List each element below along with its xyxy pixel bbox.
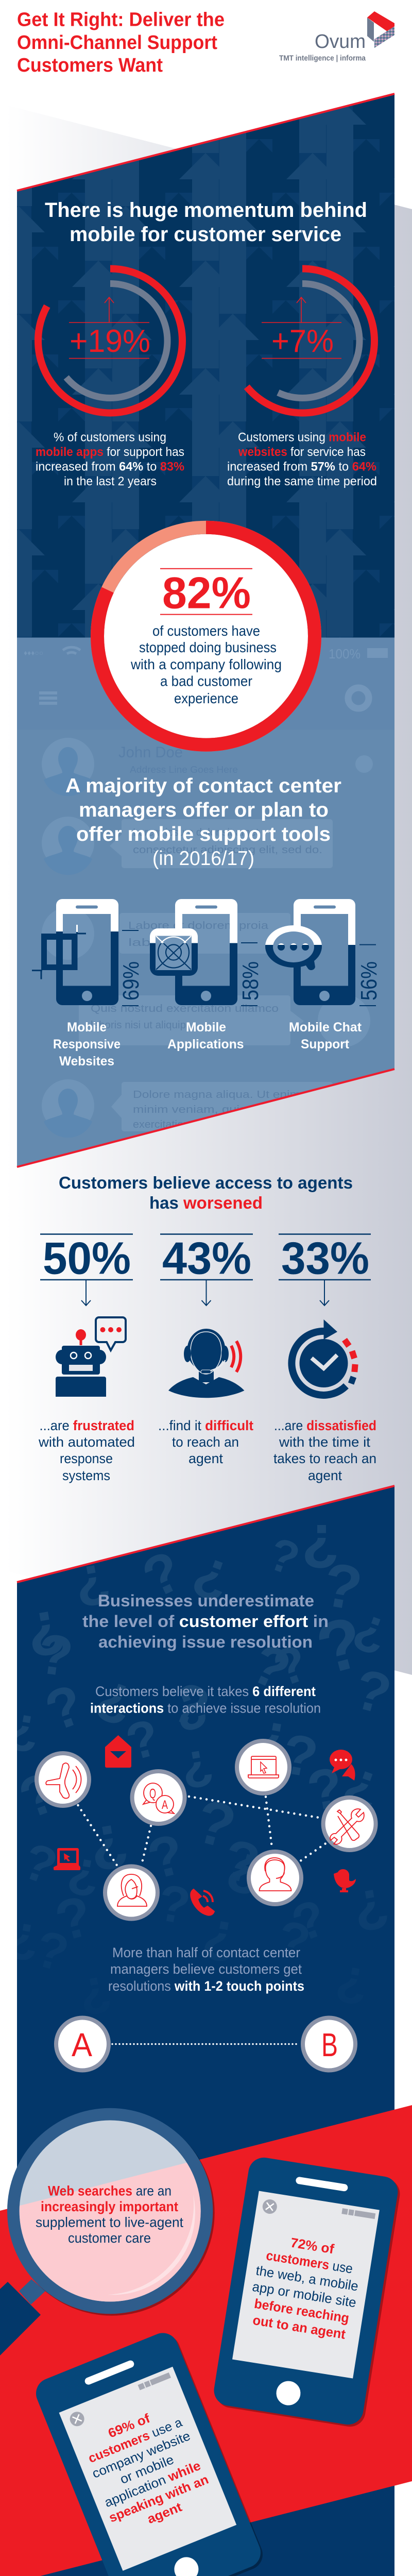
icon: female agent circle <box>105 1866 158 1919</box>
question mark pattern: ? <box>188 1786 243 1862</box>
question mark pattern: ? <box>3 1702 44 1764</box>
text: dissatisfied: ...are dissatisfied <box>274 1418 376 1433</box>
text: one to two touch points: resolutions with 1-2 touch points <box>108 1978 304 1994</box>
text: mobile apps stat <box>36 431 184 488</box>
ghost phone chat screen: Quis nostrud exercitation ullamco <box>91 1003 279 1014</box>
question mark pattern: ? <box>38 1672 92 1743</box>
text: mobile apps stat: % of customers using <box>54 431 166 445</box>
chart: phone 56% mobile chat support: 56% <box>356 961 382 1001</box>
phone: 69% of customers: 69% of <box>106 2411 152 2441</box>
question mark pattern: ? <box>141 1822 191 1892</box>
question mark pattern: ? <box>49 1884 99 1954</box>
chart: phone 69% mobile responsive websites: 69% <box>118 961 144 1001</box>
ghost phone chat screen: exercitation <box>133 1119 190 1130</box>
icon: headset agent <box>168 1329 244 1398</box>
text: one to two touch points: managers believe customers get <box>110 1961 302 1977</box>
question mark pattern: ? <box>84 1810 133 1885</box>
stat: 43% <box>160 1232 253 1306</box>
question mark pattern: ? <box>198 1907 243 1975</box>
heading: mobile momentum: mobile for customer service <box>70 223 341 246</box>
text: difficult: agent <box>188 1451 223 1466</box>
ghost phone chat screen: consectetur adipiscing elit, sed do. <box>133 844 322 856</box>
chart: phone 58% mobile applications <box>150 899 263 1052</box>
question mark pattern: ? <box>216 1827 266 1897</box>
question mark pattern: ? <box>120 1708 165 1772</box>
phone: 72% of customers: before reaching <box>253 2296 350 2326</box>
magnifier text <box>36 2183 183 2246</box>
question mark pattern: ? <box>334 1755 388 1826</box>
icon: Q and A circle <box>132 1771 185 1824</box>
panel: mobile momentum <box>17 94 394 638</box>
panel: contact center mobile tools <box>17 638 394 1173</box>
icon: tools circle <box>323 1798 376 1850</box>
ghost phone chat screen: minim veniam, quis <box>133 1104 246 1115</box>
question mark pattern: ? <box>165 1679 214 1744</box>
chart: phone 69% mobile responsive websites: Responsive <box>53 1037 121 1052</box>
ghost phone chat screen: labore. <box>128 937 180 948</box>
panel: red web search band <box>0 2105 412 2576</box>
stat: 43%: 43% <box>162 1232 251 1283</box>
icon: male agent circle <box>249 1852 301 1904</box>
chart: phone 58% mobile applications: 58% <box>238 961 263 1001</box>
panel: access to agents <box>38 1173 376 1483</box>
question mark pattern: ? <box>133 1538 192 1611</box>
question mark pattern: ? <box>33 1621 77 1689</box>
question mark pattern: ? <box>220 1838 270 1908</box>
text: mobile websites stat <box>227 431 377 488</box>
diagram: A to B: A <box>72 2026 92 2063</box>
magnifier text: supplement to live-agent <box>36 2214 183 2230</box>
phone: 72% of customers: customers use <box>265 2247 354 2277</box>
question mark pattern: ? <box>346 1602 394 1667</box>
text: difficult: to reach an <box>172 1434 239 1450</box>
callout: 82% ring: with a company following <box>130 656 282 672</box>
heading: contact center tools: managers offer or plan to <box>79 799 329 821</box>
callout: 82% ring: experience <box>174 690 238 706</box>
chart: phone 56% mobile chat support: Mobile Chat <box>289 1020 362 1035</box>
dotted connectors <box>78 1797 325 1866</box>
red diagonal top edge <box>17 1486 394 1582</box>
text: frustrated: with automated <box>38 1434 135 1450</box>
question mark pattern: ? <box>75 1964 116 2027</box>
phone: 72% of customers: out to an agent <box>252 2312 347 2342</box>
question mark pattern: ? <box>3 1910 44 1973</box>
text: difficult: ...find it difficult <box>158 1418 253 1433</box>
diagram: A to B <box>56 2018 355 2070</box>
chart: mobile websites ring +7%: +7% <box>271 324 334 359</box>
chart: mobile websites ring +7% <box>230 269 374 413</box>
phone: 69% of customers: customers use a <box>86 2415 184 2466</box>
text: frustrated: ...are frustrated <box>39 1418 134 1433</box>
callout: 82% ring: 82% <box>162 569 251 618</box>
panel: customer effort <box>3 1486 398 2576</box>
question mark pattern: ? <box>177 1738 218 1800</box>
panel background <box>17 1486 394 2576</box>
icon: envelope <box>105 1735 131 1768</box>
ghost phone chat screen: Labore et dolorem proia <box>128 920 269 931</box>
chart: phone 56% mobile chat support: Support <box>301 1037 350 1052</box>
stat: 50% <box>40 1232 133 1306</box>
chart: mobile apps ring +19%: +19% <box>70 324 150 359</box>
magnifier text: customer care <box>68 2230 151 2246</box>
heading: customer effort: Businesses underestimate <box>98 1591 314 1610</box>
text: difficult <box>158 1418 253 1466</box>
text: mobile apps stat: increased from 64% to 83% <box>36 460 184 474</box>
text: one to two touch points: More than half of contact center <box>112 1945 300 1960</box>
magnifier text: increasingly important <box>41 2199 178 2214</box>
heading: access to agents <box>59 1173 353 1212</box>
question mark pattern: ? <box>11 1759 65 1831</box>
question mark pattern: ? <box>271 1909 316 1973</box>
text: dissatisfied <box>273 1418 376 1483</box>
chart: phone 69% mobile responsive websites <box>32 899 144 1069</box>
question mark pattern: ? <box>29 1919 75 1983</box>
question mark pattern: ? <box>21 1596 71 1671</box>
icon: ringing phone <box>191 1889 214 1916</box>
text: six interactions: interactions to achieve issue resolution <box>90 1700 321 1716</box>
title: Get It Right: Deliver the <box>17 9 225 30</box>
question mark pattern: ? <box>331 1954 372 2016</box>
text: mobile websites stat: Customers using mobile <box>238 431 366 445</box>
text: one to two touch points <box>108 1945 304 1994</box>
text: mobile apps stat: in the last 2 years <box>64 474 157 488</box>
phone: 69% of customers: speaking with an <box>107 2472 211 2526</box>
heading: mobile momentum: There is huge momentum behind <box>45 199 367 222</box>
text: frustrated: response <box>60 1451 113 1466</box>
question mark pattern: ? <box>15 1832 64 1896</box>
question mark pattern: ? <box>303 1755 348 1823</box>
question mark pattern: ? <box>266 1633 315 1698</box>
heading: customer effort: the level of customer effort in <box>82 1612 329 1631</box>
text: six interactions <box>90 1684 321 1716</box>
chart: phone 56% mobile chat support <box>265 899 382 1052</box>
logo: Ovum header <box>279 11 394 63</box>
title <box>17 9 225 76</box>
chart: mobile apps ring +19% <box>38 269 182 413</box>
title: Omni-Channel Support <box>17 32 217 54</box>
ghost phone chat screen: 100% <box>329 646 360 662</box>
ghost phone chat screen: Lorem ipsum dolor sit amet, <box>133 827 262 838</box>
icon: app <box>150 928 198 976</box>
stat: 33%: 33% <box>281 1232 369 1283</box>
phone: 72% of customers <box>212 2156 402 2429</box>
title: Customers Want <box>17 55 163 76</box>
question mark pattern: ? <box>308 1600 372 1690</box>
text: mobile websites stat: websites for service has <box>238 445 366 459</box>
phone: 72% of customers: 72% of <box>289 2234 335 2257</box>
question mark pattern: ? <box>63 1846 104 1908</box>
callout: 82% ring: stopped doing business <box>139 639 277 655</box>
heading: customer effort <box>82 1591 329 1651</box>
ghost phone chat screen: Dolore magna aliqua. Ut enim <box>133 1089 300 1100</box>
icon: laptop circle <box>237 1741 289 1793</box>
chart: phone 69% mobile responsive websites: Websites <box>59 1054 114 1069</box>
heading: contact center tools: offer mobile support tools <box>76 823 331 845</box>
panel background <box>17 638 394 1167</box>
question mark pattern: ? <box>349 1876 393 1944</box>
red diagonal bottom edge <box>17 1069 394 1167</box>
callout: 82% ring <box>97 528 315 745</box>
stat: 33% <box>279 1232 371 1306</box>
question mark pattern: ? <box>285 1888 334 1953</box>
heading: access to agents: Customers believe access to agents <box>59 1173 353 1192</box>
question mark pattern: ? <box>242 1631 300 1703</box>
icon: Q and A circle: Q <box>149 1786 156 1801</box>
chart: phone 58% mobile applications: Applications <box>167 1037 244 1052</box>
icon: bird <box>334 1869 356 1892</box>
phone: 69% of customers: application while <box>102 2459 203 2510</box>
chart: phone 69% mobile responsive websites: Mobile <box>67 1020 107 1035</box>
text: frustrated <box>38 1418 135 1483</box>
text: mobile apps stat: mobile apps for support has <box>36 445 184 459</box>
question mark pattern: ? <box>153 1873 195 1936</box>
network of touch points <box>37 1735 376 1919</box>
red diagonal top edge <box>17 94 394 191</box>
text: frustrated: systems <box>62 1468 110 1483</box>
question mark pattern: ? <box>184 1544 238 1615</box>
logo: Ovum header: TMT intelligence | informa <box>279 54 366 63</box>
icon: chat bubble <box>265 925 322 970</box>
magnifier text: Web searches are an <box>48 2183 171 2199</box>
callout: 82% ring: of customers have <box>152 623 260 639</box>
question mark pattern <box>3 1512 398 2027</box>
ghost phone chat screen <box>24 646 388 1131</box>
text: mobile websites stat: during the same time period <box>227 474 377 488</box>
logo: Ovum header: Ovum <box>315 31 366 53</box>
phone: 69% of customers: company website <box>90 2429 193 2481</box>
heading: access to agents: has worsened <box>149 1193 263 1212</box>
text: dissatisfied: with the time it <box>279 1434 371 1450</box>
icon: small laptop <box>54 1848 80 1870</box>
icon: Q and A circle: A <box>162 1798 168 1812</box>
ghost phone chat screen: ♦♦♦○○ <box>24 649 43 657</box>
background band: upper grey <box>0 104 412 1675</box>
chart: phone 58% mobile applications: Mobile <box>186 1020 226 1035</box>
question mark pattern: ? <box>163 1669 217 1741</box>
panel background with arrows <box>17 94 394 638</box>
ghost phone chat screen: John Doe <box>118 744 183 761</box>
diagram: A to B: B <box>321 2026 338 2063</box>
callout: 82% ring: a bad customer <box>160 673 252 689</box>
icon: robot <box>56 1317 126 1397</box>
icon: responsive crop <box>41 934 77 970</box>
heading: customer effort: achieving issue resolution <box>98 1633 313 1651</box>
icon: chat bubbles <box>330 1750 355 1781</box>
question mark pattern: ? <box>262 1528 306 1586</box>
ghost phone chat screen: laboris nisi ut aliquip <box>91 1020 186 1031</box>
question mark pattern: ? <box>88 1667 142 1739</box>
question mark pattern: ? <box>70 1551 115 1619</box>
question mark pattern: ? <box>278 1722 322 1790</box>
text: six interactions: Customers believe it takes 6 different <box>95 1684 316 1699</box>
magnifier handle <box>19 2279 45 2304</box>
phone: 72% of customers: app or mobile site <box>251 2279 357 2310</box>
question mark pattern: ? <box>301 1512 339 1581</box>
text: mobile websites stat: increased from 57% to 64% <box>227 460 376 474</box>
heading: mobile momentum <box>45 199 367 246</box>
text: dissatisfied: takes to reach an <box>273 1451 376 1466</box>
heading: contact center tools: A majority of contact center <box>65 775 341 797</box>
magnifying glass callout <box>0 2108 216 2355</box>
question mark pattern: ? <box>318 1549 367 1624</box>
phone: 69% of customers <box>31 2328 267 2576</box>
icon: clock with arrow <box>291 1319 358 1395</box>
pattern fade <box>17 1777 394 2035</box>
ghost phone chat screen: Address Line Goes Here <box>130 765 238 775</box>
icon: phone circle <box>37 1753 89 1806</box>
text: dissatisfied: agent <box>308 1468 342 1483</box>
heading: contact center tools <box>65 775 341 870</box>
stat: 50%: 50% <box>43 1232 131 1283</box>
phone: 69% of customers: or mobile <box>118 2452 176 2487</box>
question mark pattern: ? <box>250 1708 295 1776</box>
question mark pattern: ? <box>348 1657 398 1727</box>
heading: contact center tools: (in 2016/17) <box>152 848 254 870</box>
red band <box>0 2105 412 2576</box>
phone: 69% of customers: agent <box>145 2500 184 2527</box>
phone: 72% of customers: the web, a mobile <box>255 2263 359 2294</box>
